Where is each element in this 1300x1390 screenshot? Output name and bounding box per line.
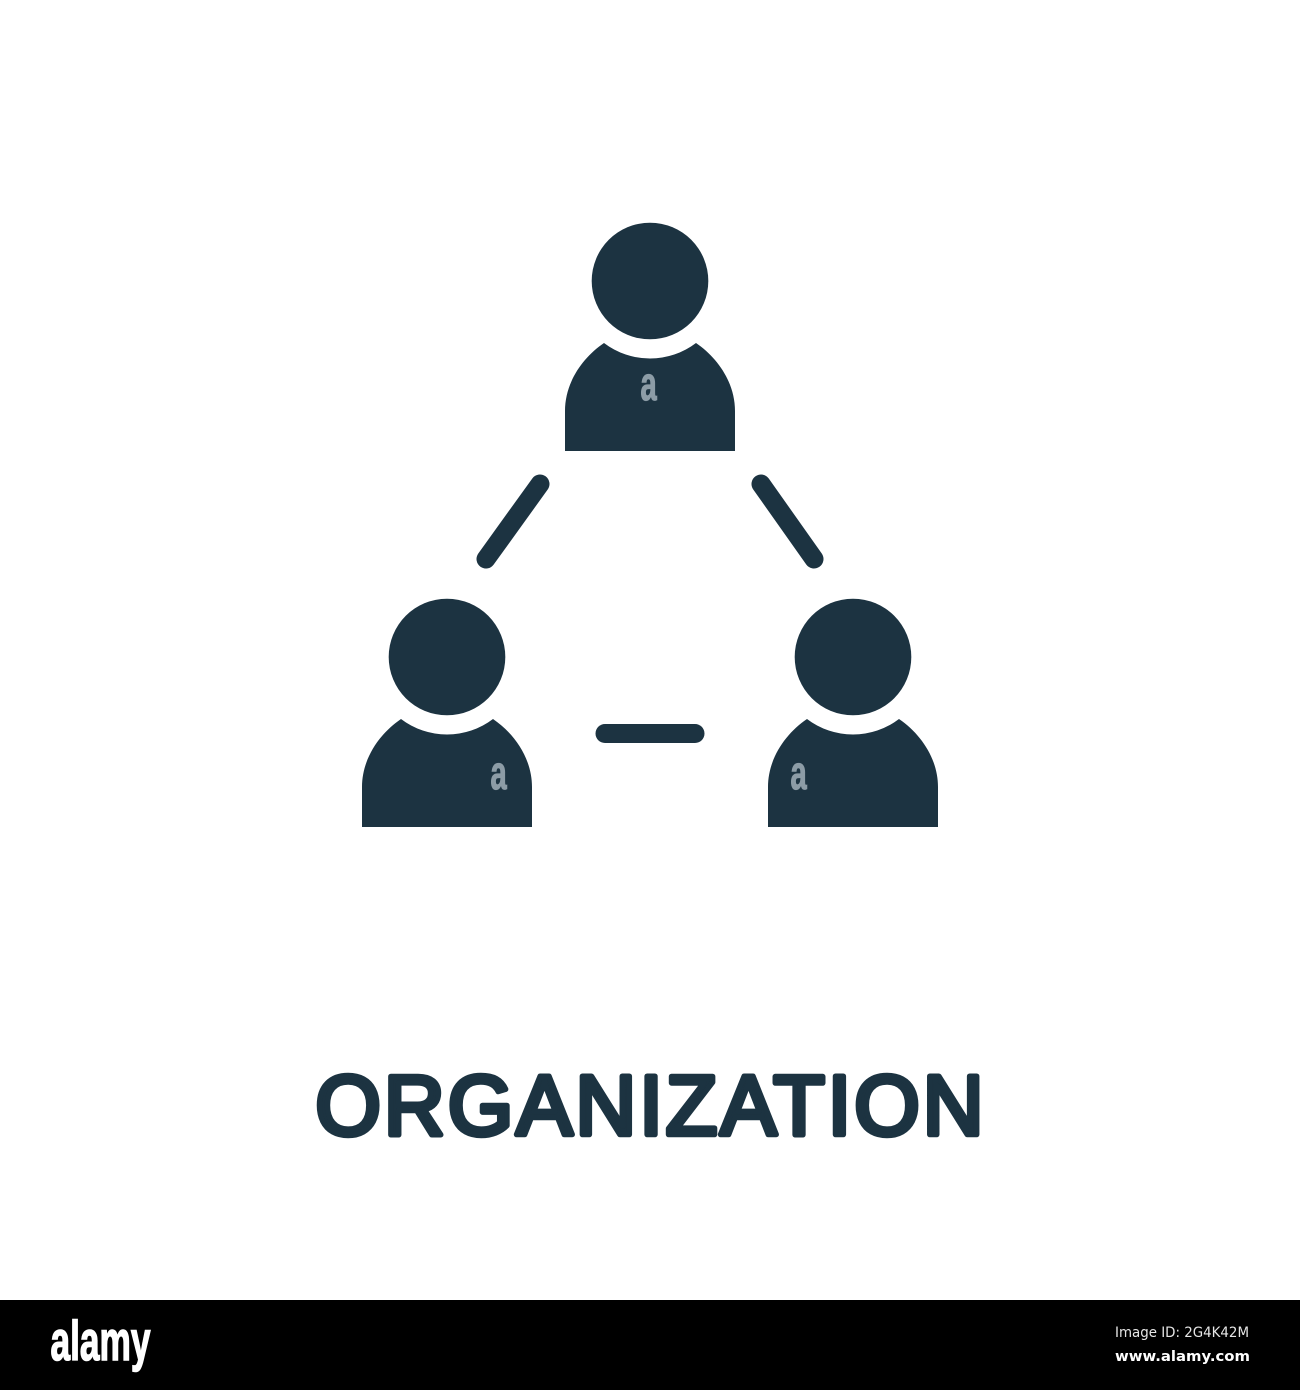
connector: bottom link xyxy=(605,724,695,743)
footer website: www.alamy.com xyxy=(1115,1349,1250,1365)
title: ORGANIZATION xyxy=(316,1058,984,1152)
watermark: letter marks on the figures: a xyxy=(490,748,507,800)
icon: bottom left person xyxy=(362,599,532,827)
icon: top person xyxy=(565,223,735,451)
icon: organization network of three people xyxy=(362,223,938,827)
footer bar xyxy=(0,1300,1300,1390)
footer image id: Image ID: 2G4K42M xyxy=(1115,1325,1249,1341)
footer logo: alamy xyxy=(50,1309,150,1372)
connector: left link xyxy=(486,484,540,559)
watermark: letter marks on the figures: a xyxy=(790,748,807,800)
watermark: letter marks on the figures: a xyxy=(640,359,657,411)
icon: bottom right person xyxy=(768,599,938,827)
watermark: letter marks on the figures xyxy=(490,359,807,800)
connector: right link xyxy=(761,484,814,559)
